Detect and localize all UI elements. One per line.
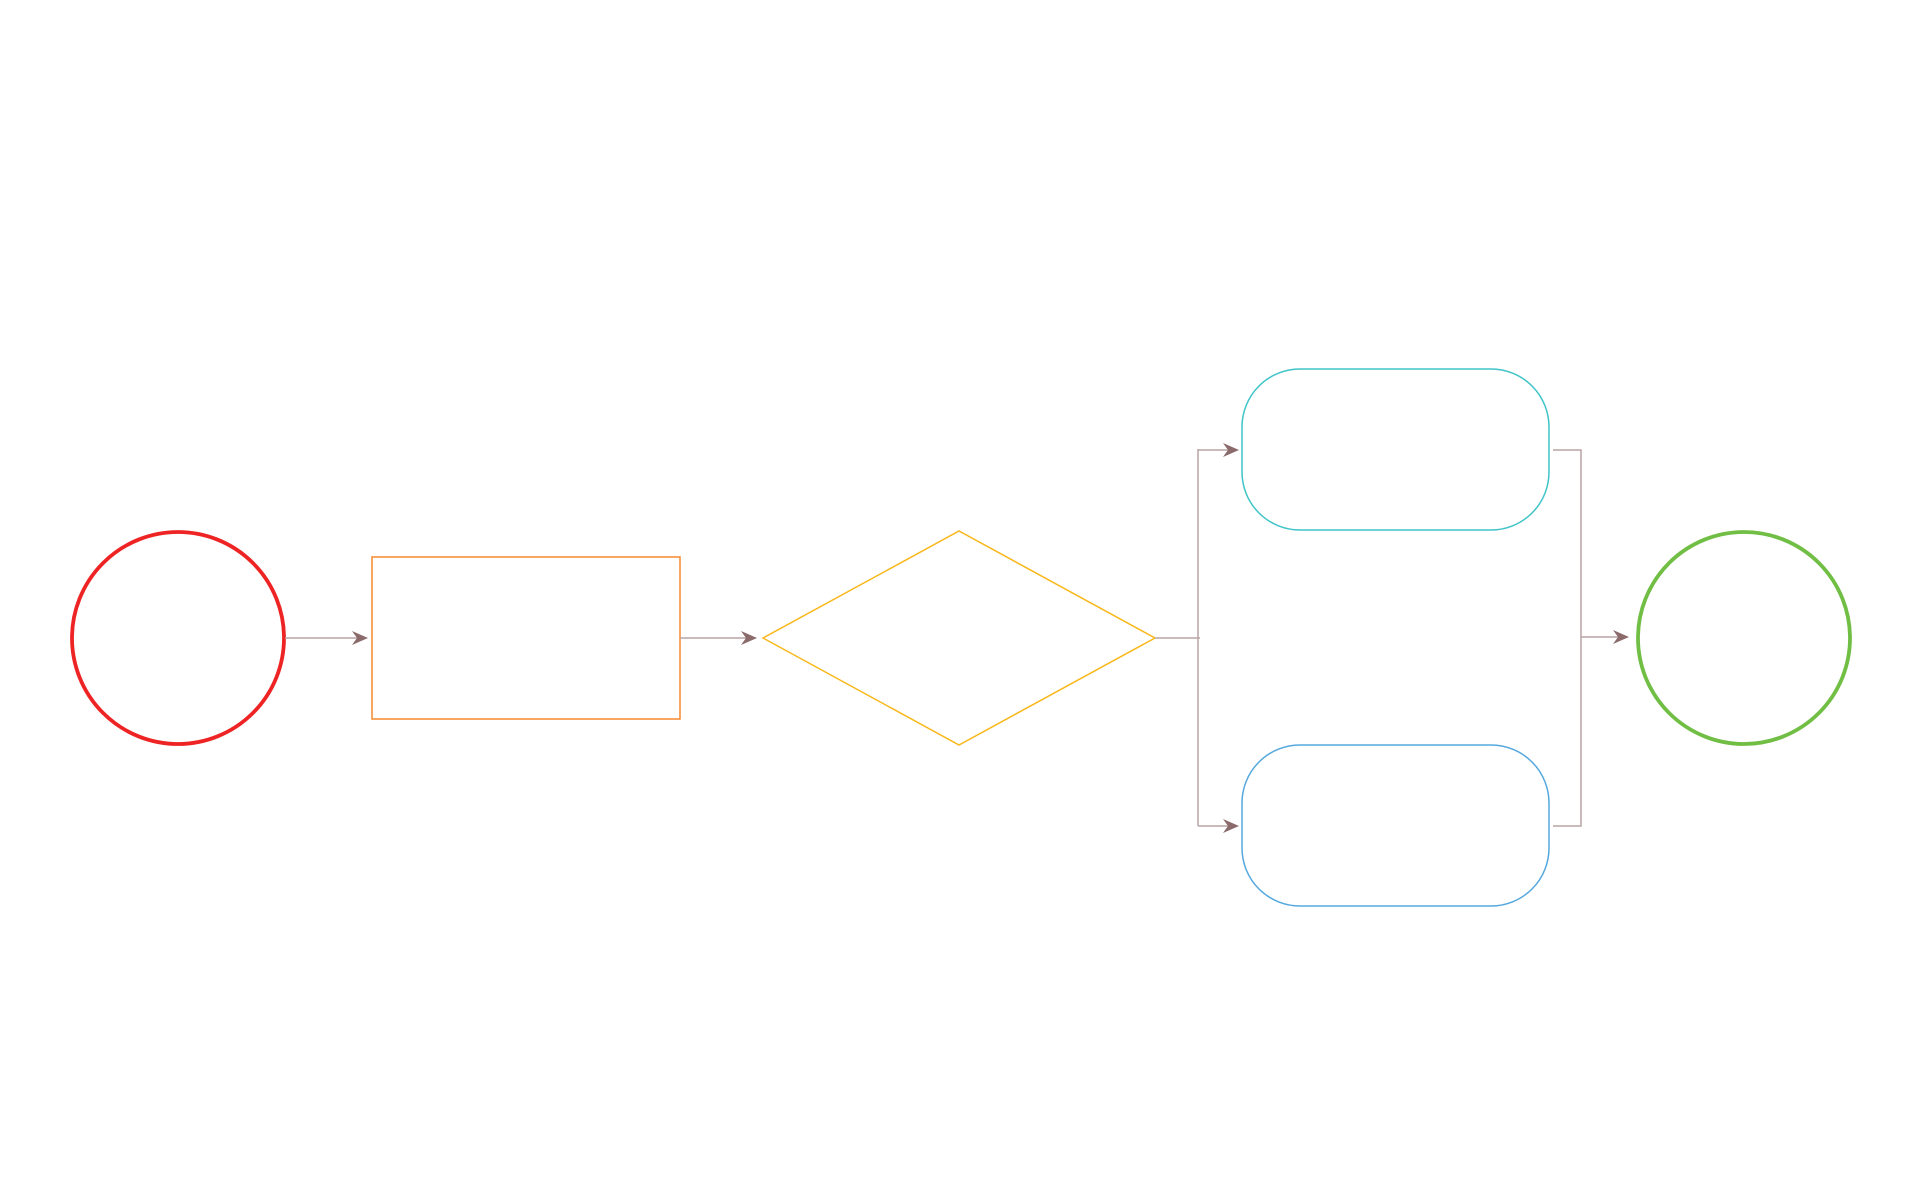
arrow: to bottom box bbox=[1198, 825, 1237, 827]
arrow: to end bbox=[1581, 636, 1627, 638]
top rounded box bbox=[1242, 369, 1549, 530]
end circle bbox=[1638, 532, 1850, 744]
arrow: process to decision bbox=[680, 637, 755, 639]
bottom rounded box bbox=[1242, 745, 1549, 906]
start circle bbox=[72, 532, 284, 744]
branch connector bbox=[1155, 449, 1237, 826]
process rectangle bbox=[372, 557, 680, 719]
arrow: to top box bbox=[1198, 449, 1237, 451]
merge connector bbox=[1553, 450, 1627, 826]
arrow: start to process bbox=[285, 637, 366, 639]
decision diamond bbox=[763, 531, 1155, 745]
